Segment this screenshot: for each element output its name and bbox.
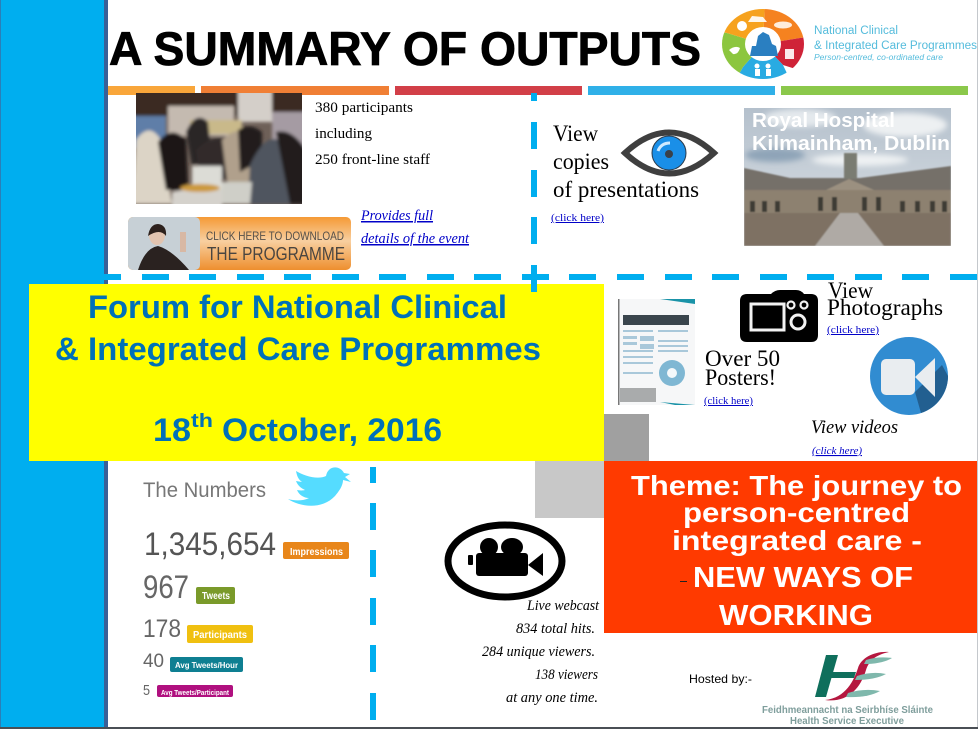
yellow forum banner — [29, 284, 604, 461]
posters text: Over 50 — [705, 346, 780, 371]
theme box: Theme: The journey to — [631, 470, 962, 501]
theme box: integrated care - — [672, 525, 922, 556]
icon: movie camera — [448, 525, 562, 597]
yellow forum banner: th — [191, 411, 213, 432]
view photographs text: Photographs — [827, 295, 943, 320]
HSE logo: Health Service Executive — [790, 716, 904, 727]
view presentations text: copies — [553, 149, 609, 174]
participants text: 380 participants — [315, 100, 413, 116]
vertical dashed divider bottom — [370, 467, 376, 720]
theme box — [604, 461, 977, 633]
photo caption: Royal Hospital — [752, 110, 895, 132]
view videos text — [811, 417, 898, 457]
yellow forum banner: October, 2016 — [222, 412, 442, 448]
photo: delegates at the event — [136, 93, 302, 204]
view photographs text — [827, 278, 943, 336]
poster thumbnail — [618, 299, 695, 405]
posters text: Posters! — [705, 365, 776, 390]
live webcast text: 138 viewers — [535, 667, 598, 683]
view photographs text: (click here) — [827, 325, 879, 336]
yellow forum banner: 18 — [153, 412, 191, 448]
stat: participants: 178 — [143, 615, 181, 643]
live webcast text: Live webcast — [526, 598, 600, 614]
participants text — [315, 100, 430, 168]
stat: tweets: Tweets — [202, 591, 230, 602]
stat: participants: Participants — [193, 630, 247, 641]
view presentations text — [551, 121, 699, 224]
logo text: National Clinical — [814, 25, 898, 37]
stat: avg tweets per hour — [143, 651, 243, 672]
stat: avg tweets per hour: 40 — [143, 651, 164, 672]
grey decorative squares — [535, 414, 649, 518]
photo caption — [752, 110, 950, 155]
logo text: & Integrated Care Programmes — [814, 40, 977, 52]
logo: National Clinical programmes wheel — [722, 9, 804, 79]
icon: camera — [740, 290, 818, 342]
view presentations text: of presentations — [553, 177, 699, 202]
stat: avg tweets per participant: Avg Tweets/Participant — [161, 688, 229, 697]
title: A SUMMARY OF OUTPUTS — [109, 22, 701, 75]
twitter numbers panel — [143, 467, 351, 699]
stat: impressions: 1,345,654 — [144, 526, 276, 562]
stat: impressions: Impressions — [290, 547, 343, 558]
view photographs text: View — [828, 278, 873, 303]
live webcast text: at any one time. — [506, 690, 598, 706]
HSE logo: Feidhmeannacht na Seirbhíse Sláinte — [762, 705, 933, 716]
download programme button: THE PROGRAMME — [207, 244, 345, 264]
heading: the numbers: The Numbers — [143, 479, 266, 502]
icon: video camera — [870, 337, 948, 415]
stat: avg tweets per participant: 5 — [143, 682, 150, 699]
left blue sidebar — [0, 0, 108, 727]
yellow forum banner: Forum for National Clinical — [88, 289, 507, 325]
logo text: Person-centred, co-ordinated care — [814, 53, 944, 62]
hosted by label: Hosted by:- — [689, 672, 752, 686]
live webcast text: 284 unique viewers. — [482, 644, 595, 660]
theme box: person-centred — [683, 497, 910, 528]
stat: tweets — [143, 569, 235, 605]
photo: Royal Hospital Kilmainham — [744, 108, 951, 246]
link: provides full details: Provides full — [360, 208, 433, 224]
download programme button — [128, 217, 351, 270]
view videos text: (click here) — [812, 445, 862, 457]
stat: participants — [143, 615, 253, 643]
posters text — [704, 346, 780, 407]
stat: avg tweets per participant — [143, 682, 233, 699]
logo text — [814, 25, 977, 62]
theme box: NEW WAYS OF — [693, 562, 913, 594]
link: provides full details — [360, 208, 470, 247]
participants text: including — [315, 126, 372, 142]
live webcast text: 834 total hits. — [516, 621, 595, 637]
yellow forum banner: & Integrated Care Programmes — [55, 331, 541, 367]
live webcast text — [482, 598, 600, 706]
download programme button: CLICK HERE TO DOWNLOAD — [206, 229, 344, 243]
horizontal dashed divider — [100, 274, 977, 280]
stat: avg tweets per hour: Avg Tweets/Hour — [175, 660, 239, 670]
posters text: (click here) — [704, 396, 753, 407]
colour divider bars — [108, 86, 968, 95]
HSE logo — [762, 652, 933, 727]
view videos text: View videos — [811, 417, 898, 438]
theme box: WORKING — [719, 600, 873, 632]
vertical dashed divider top — [531, 93, 537, 292]
link: provides full details: details of the event — [361, 231, 470, 247]
icon: eye — [625, 132, 714, 174]
icon: twitter bird — [288, 467, 351, 506]
view presentations text: View — [553, 121, 598, 146]
photo caption: Kilmainham, Dublin — [752, 133, 950, 155]
stat: impressions — [144, 526, 349, 562]
view presentations text: (click here) — [551, 213, 604, 224]
participants text: 250 front-line staff — [315, 152, 430, 168]
stat: tweets: 967 — [143, 569, 189, 605]
